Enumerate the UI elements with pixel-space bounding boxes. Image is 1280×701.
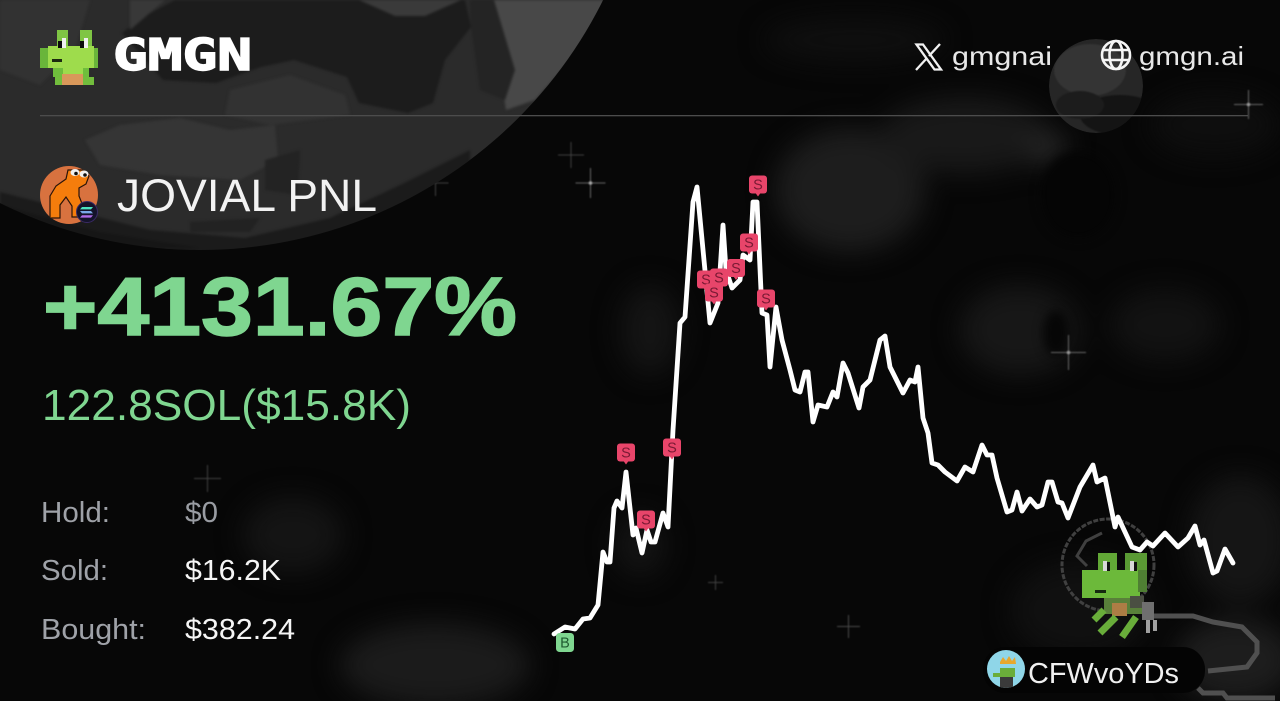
username: CFWvoYDs [1028,658,1179,690]
user avatar [987,650,1025,688]
header divider [40,115,1248,116]
sell marker 5 [705,284,723,304]
token title: JOVIAL PNL [117,170,377,221]
profit amount: 122.8SOL($15.8K) [42,381,411,430]
stat: bought: Bought: [41,614,146,646]
sell marker 1 [617,444,635,464]
stat: sold: Sold: [41,555,108,587]
social handle: gmgn.ai: gmgn.ai [1139,41,1244,71]
sell marker 10: S [761,292,771,308]
sell marker 9 [749,176,767,196]
PNL percentage: +4131.67% [43,260,517,353]
stat: hold: $0 [185,497,218,529]
stat: hold [41,497,218,529]
price line chart [554,187,1233,634]
social handle: gmgnai: gmgnai [952,41,1052,71]
sell marker 6: S [714,270,724,286]
large moon [0,0,603,250]
user badge [983,647,1205,693]
sell marker 8 [740,234,758,254]
logo: GMGN frog [40,30,98,85]
sell marker 2 [637,510,655,532]
stat: sold [41,555,281,587]
stat: bought [41,614,295,646]
space frog mascot [1062,519,1157,637]
stat: bought: $382.24 [185,614,295,646]
sell marker 5: S [709,286,719,302]
icon: X [916,44,941,70]
logo wordmark: GMGN [113,30,252,81]
icon: globe [1102,41,1130,69]
token avatar [40,166,98,224]
sell marker 9: S [753,178,763,194]
stat: sold: $16.2K [185,555,281,587]
sell marker 3 [663,438,681,460]
sell marker 3: S [667,440,677,456]
buy marker: B [560,636,570,652]
sell marker 7: S [731,261,741,277]
small moon [1049,39,1143,133]
sell marker 7 [727,259,745,280]
sell marker 8: S [744,236,754,252]
sell marker 1: S [621,446,631,462]
stat: hold: Hold: [41,497,110,529]
tether rope [1154,616,1275,698]
sell marker 4: S [701,272,711,288]
sell marker 6 [710,268,728,290]
sell marker 10 [757,290,775,310]
stars [194,90,1263,638]
sell marker 4 [697,270,715,292]
buy marker [556,633,574,652]
sell markers [617,176,775,532]
sell marker 2: S [641,512,651,528]
